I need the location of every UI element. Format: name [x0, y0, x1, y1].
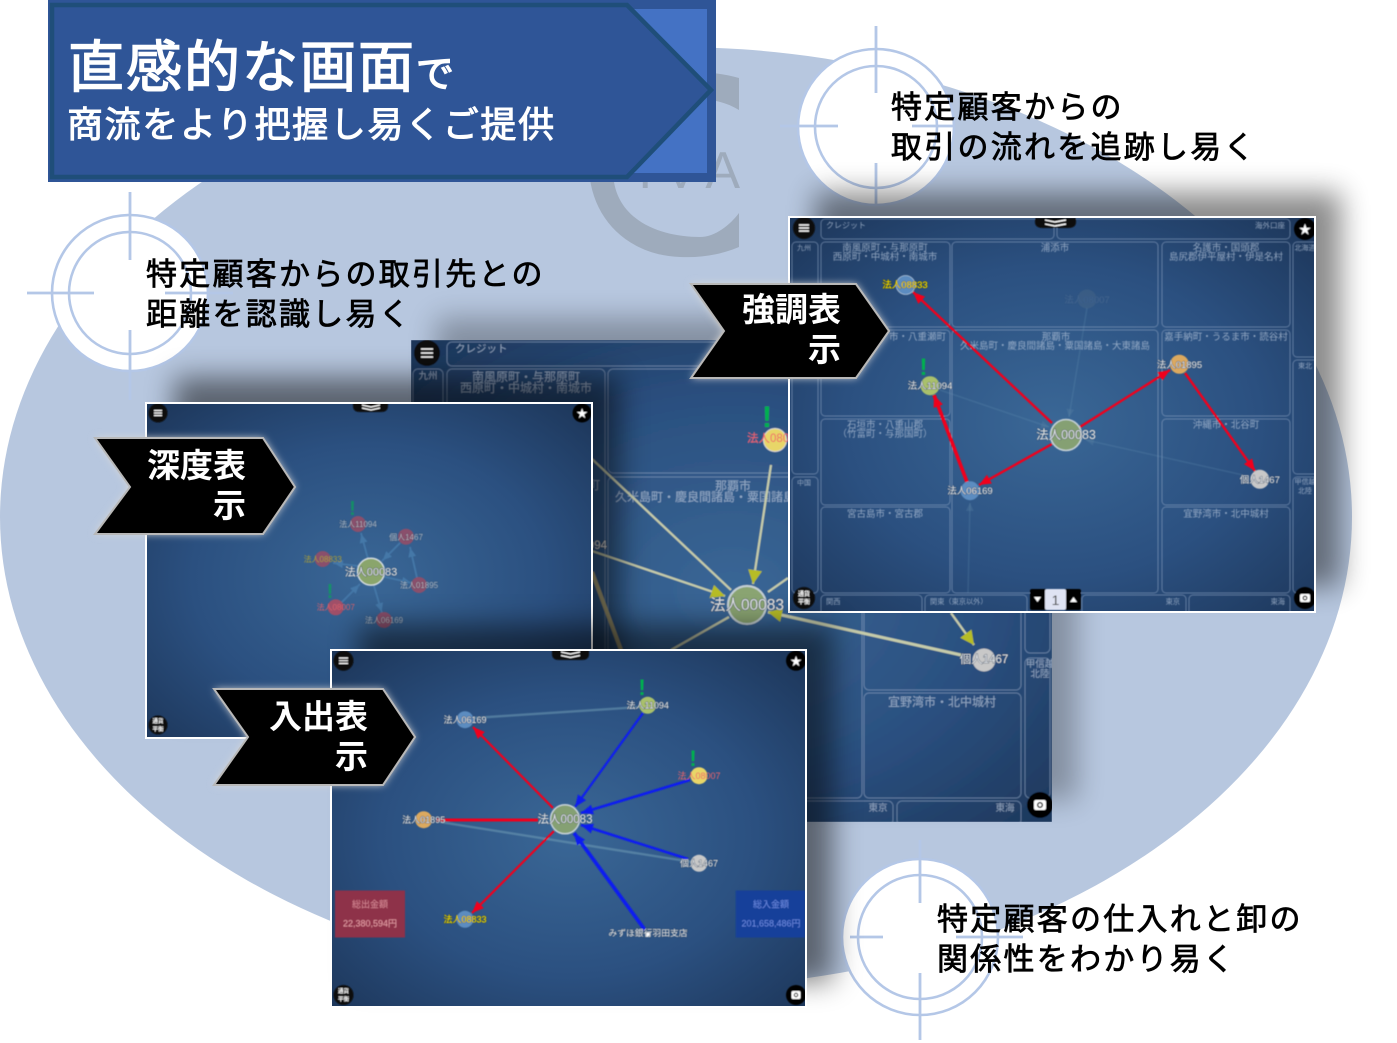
node: 法人06169 — [947, 481, 993, 500]
node: 法人08007 — [317, 581, 355, 615]
map grid: 浦添市 — [1041, 242, 1070, 254]
badge: 深度表示 — [95, 438, 295, 534]
badge: 強調表示 — [691, 284, 889, 378]
node: 法人00083: 法人00083 — [710, 596, 784, 614]
node: 法人08833 — [443, 911, 487, 928]
map grid: 西原町・中城村・南城市 — [460, 380, 592, 395]
panel: base network window — [411, 340, 1055, 825]
button: star — [786, 651, 806, 671]
node: 法人06169: 法人06169 — [443, 714, 487, 725]
node: みずほ銀行羽田支店: みずほ銀行羽田支店 — [608, 927, 688, 938]
node: 法人01895 — [1157, 355, 1202, 374]
title text: 直感的な画面で — [68, 36, 454, 99]
badge: 深度表示: 深度表 — [147, 447, 246, 484]
map grid: 北海道 — [1294, 243, 1316, 252]
button: menu — [148, 404, 168, 422]
node: 法人08833: 法人08833 — [882, 279, 928, 291]
button: currency: 通貨 — [152, 717, 164, 725]
node: 法人08833: 法人08833 — [304, 554, 342, 564]
button: menu — [334, 651, 354, 671]
node: 個人1467 — [680, 855, 718, 872]
map grid: 東京 — [1166, 597, 1180, 606]
node: 法人08007 — [746, 406, 788, 453]
map grid: 九州 — [797, 243, 811, 252]
map grid — [413, 342, 1055, 825]
node: 法人08007 — [677, 746, 721, 784]
map grid: 嘉手納町・うるま市・読谷村 — [1164, 331, 1288, 343]
callout: top right — [891, 90, 1257, 165]
node: 法人08833 — [882, 276, 928, 294]
button: menu — [793, 217, 815, 239]
map grid: 中国 — [797, 478, 811, 487]
map grid: 宜野湾市・北中城村 — [888, 694, 996, 709]
button: menu — [414, 340, 440, 366]
node: 法人01895 — [402, 811, 445, 828]
node: 法人08833: 法人08833 — [443, 914, 487, 924]
pager — [1030, 589, 1081, 610]
map grid: 東北 — [1298, 361, 1312, 370]
node: 法人00083: 法人00083 — [538, 813, 592, 826]
badge: 深度表示: 示 — [213, 487, 246, 524]
map grid: 西原町・中城村・南城市 — [833, 251, 938, 263]
node: 法人11094 — [339, 498, 377, 532]
map grid: 名護市・国頭郡 — [1193, 242, 1260, 254]
node: 法人00083: 法人00083 — [345, 566, 397, 578]
node: 法人11094: 法人11094 — [908, 380, 952, 392]
total outgoing box: 総出金額 — [352, 898, 388, 910]
node: 法人01895 — [400, 577, 439, 593]
button: currency: 平衡 — [798, 598, 810, 606]
callout: left: 距離を認識し易く — [146, 297, 412, 332]
badge: 入出表示 — [214, 689, 415, 785]
node: 法人08007: 法人08007 — [747, 432, 802, 445]
map grid: （竹富町・与那国町） — [837, 428, 933, 440]
node: 個人1467: 個人1467 — [960, 653, 1008, 666]
badge: 入出表示: 入出表 — [269, 698, 368, 735]
map grid: 南風原町・与那原町 — [472, 369, 580, 384]
node: 法人01895: 法人01895 — [400, 580, 439, 590]
node: 法人08007: ! — [689, 746, 697, 771]
callout: bottom: 関係性をわかり易く — [937, 942, 1236, 977]
node: 個人1467 — [1240, 470, 1280, 489]
node: 法人00083 — [710, 586, 784, 624]
button: currency: 通貨 — [338, 987, 349, 995]
node: 法人06169 — [365, 612, 404, 628]
button: camera — [786, 985, 806, 1005]
node: 法人00083 — [1036, 420, 1096, 450]
button: star: ★ — [1298, 220, 1312, 238]
target icon: left — [27, 192, 233, 400]
button: currency: 平衡 — [338, 995, 349, 1003]
callout: bottom — [937, 902, 1303, 977]
node: 法人00083: 法人00083 — [1036, 428, 1096, 442]
node: 法人08007: 法人08007 — [677, 770, 721, 781]
button: star — [1294, 218, 1316, 240]
map grid: 石垣市・八重山郡 — [847, 419, 923, 431]
node: 法人06169 — [443, 711, 487, 728]
button: camera — [1294, 587, 1316, 609]
callout: top right: 特定顧客からの — [891, 90, 1124, 125]
node: 法人08007: ! — [327, 581, 333, 603]
node: 法人11094: ! — [920, 354, 928, 381]
node: 法人11094: 法人11094 — [627, 700, 669, 710]
node: 法人08007: ! — [762, 401, 772, 434]
network links — [592, 459, 974, 655]
depth links — [333, 533, 417, 613]
target icon: bottom — [842, 840, 1023, 1040]
map grid: 市・八重瀬町 — [889, 331, 946, 343]
logo watermark: IVA — [638, 142, 740, 200]
badge: 強調表示: 示 — [808, 331, 841, 368]
node: 法人01895: 法人01895 — [402, 814, 445, 825]
faded node: 法人08007 — [1064, 290, 1110, 308]
logo watermark — [589, 72, 740, 257]
node: 法人08007: 法人08007 — [317, 602, 355, 612]
map grid: 沖縄市・北谷町 — [1193, 419, 1260, 431]
map grid: 東海 — [1271, 597, 1285, 606]
button: star: ★ — [576, 406, 588, 422]
highlighted red links — [913, 292, 1255, 485]
callout: left — [146, 257, 545, 332]
node: 法人11094 label: 11094 — [576, 540, 608, 552]
map grid: 島尻郡伊平屋村・伊是名村 — [1169, 251, 1283, 263]
map grid — [792, 219, 1319, 617]
callout: left: 特定顧客からの取引先との — [146, 257, 545, 292]
button: star — [572, 404, 592, 422]
pager: 1 — [1052, 592, 1060, 608]
node: 法人06169: 法人06169 — [365, 615, 404, 625]
map grid: 東海 — [995, 802, 1015, 814]
button: currency — [793, 587, 815, 609]
node: 法人11094: 法人11094 — [339, 519, 377, 529]
outgoing red links — [436, 727, 554, 913]
node: 法人11094 — [908, 354, 952, 395]
map grid: 海外口座 — [1255, 220, 1285, 230]
map grid: クレジット — [455, 343, 508, 355]
node: 個人1467: 個人1467 — [680, 858, 718, 868]
button: camera — [1027, 792, 1053, 818]
panel: depth view window — [146, 403, 592, 738]
node: 法人11094: ! — [349, 498, 356, 520]
total incoming box: 201,658,486円 — [741, 918, 801, 928]
panel: in/out view window — [331, 650, 806, 1007]
panel: highlighted network window — [789, 217, 1319, 617]
map grid: 那覇市 — [715, 479, 751, 493]
button: star: ★ — [790, 654, 802, 670]
faded links — [440, 707, 692, 862]
badge: 入出表示: 示 — [335, 738, 368, 775]
node: 個人1467: 個人1467 — [1240, 474, 1280, 486]
map grid: 宮古島市・宮古郡 — [847, 508, 923, 520]
node: 法人11094 — [627, 675, 669, 714]
map grid: 北陸 — [1030, 668, 1050, 680]
drawer tab — [1035, 218, 1076, 228]
map grid: 関西 — [826, 597, 840, 606]
faded links — [940, 308, 1243, 593]
total outgoing box: 22,380,594円 — [343, 918, 397, 928]
drawer tab — [353, 403, 388, 412]
node: 法人11094: ! — [638, 675, 646, 700]
node: 法人08833 — [304, 551, 342, 567]
map grid: 九州 — [418, 370, 438, 382]
callout: bottom: 特定顧客の仕入れと卸の — [937, 902, 1303, 937]
drawer tab — [552, 650, 589, 660]
target icon: top right — [780, 26, 954, 205]
node: 法人00083 — [538, 805, 592, 834]
map grid: 町 — [588, 478, 600, 492]
button: currency: 平衡 — [152, 725, 164, 733]
map grid: 久米島町・慶良間諸島・粟国諸島・大東諸島 — [960, 340, 1150, 352]
button: currency — [148, 716, 168, 734]
node: 法人01895: 法人01895 — [1157, 359, 1202, 371]
map grid: 宜野湾市・北中城村 — [1183, 508, 1269, 520]
map grid: 甲信越 — [1294, 477, 1316, 486]
map grid: 東京 — [868, 802, 888, 814]
total outgoing box — [335, 890, 405, 938]
total incoming box: 総入金額 — [753, 898, 789, 910]
subtitle text: 商流をより把握し易くご提供 — [67, 104, 556, 145]
node: 個人1467 — [960, 648, 1008, 672]
button: currency — [334, 985, 354, 1005]
map grid: 南風原町・与那原町 — [842, 242, 928, 254]
callout: top right: 取引の流れを追跡し易く — [891, 130, 1257, 165]
map grid: 関東（東京以外） — [930, 597, 988, 606]
badge: 強調表示: 強調表 — [742, 291, 841, 328]
faded node: 法人08007: 法人08007 — [1064, 294, 1110, 306]
node: 個人1467: 個人1467 — [389, 532, 423, 542]
incoming blue links — [574, 713, 690, 930]
button: currency: 通貨 — [798, 590, 810, 598]
title banner — [48, 0, 716, 182]
map grid: クレジット — [826, 221, 866, 230]
node: 個人1467 — [389, 529, 423, 545]
node: 法人06169: 法人06169 — [947, 485, 993, 497]
map grid: 久米島町・慶良間諸島・粟国諸島 — [615, 489, 795, 504]
map grid: 那覇市 — [1042, 331, 1071, 343]
map grid: 北陸 — [1298, 486, 1312, 495]
node: 法人00083 — [345, 558, 397, 585]
map grid: 甲信越 — [1026, 658, 1055, 670]
total incoming box — [736, 890, 805, 938]
